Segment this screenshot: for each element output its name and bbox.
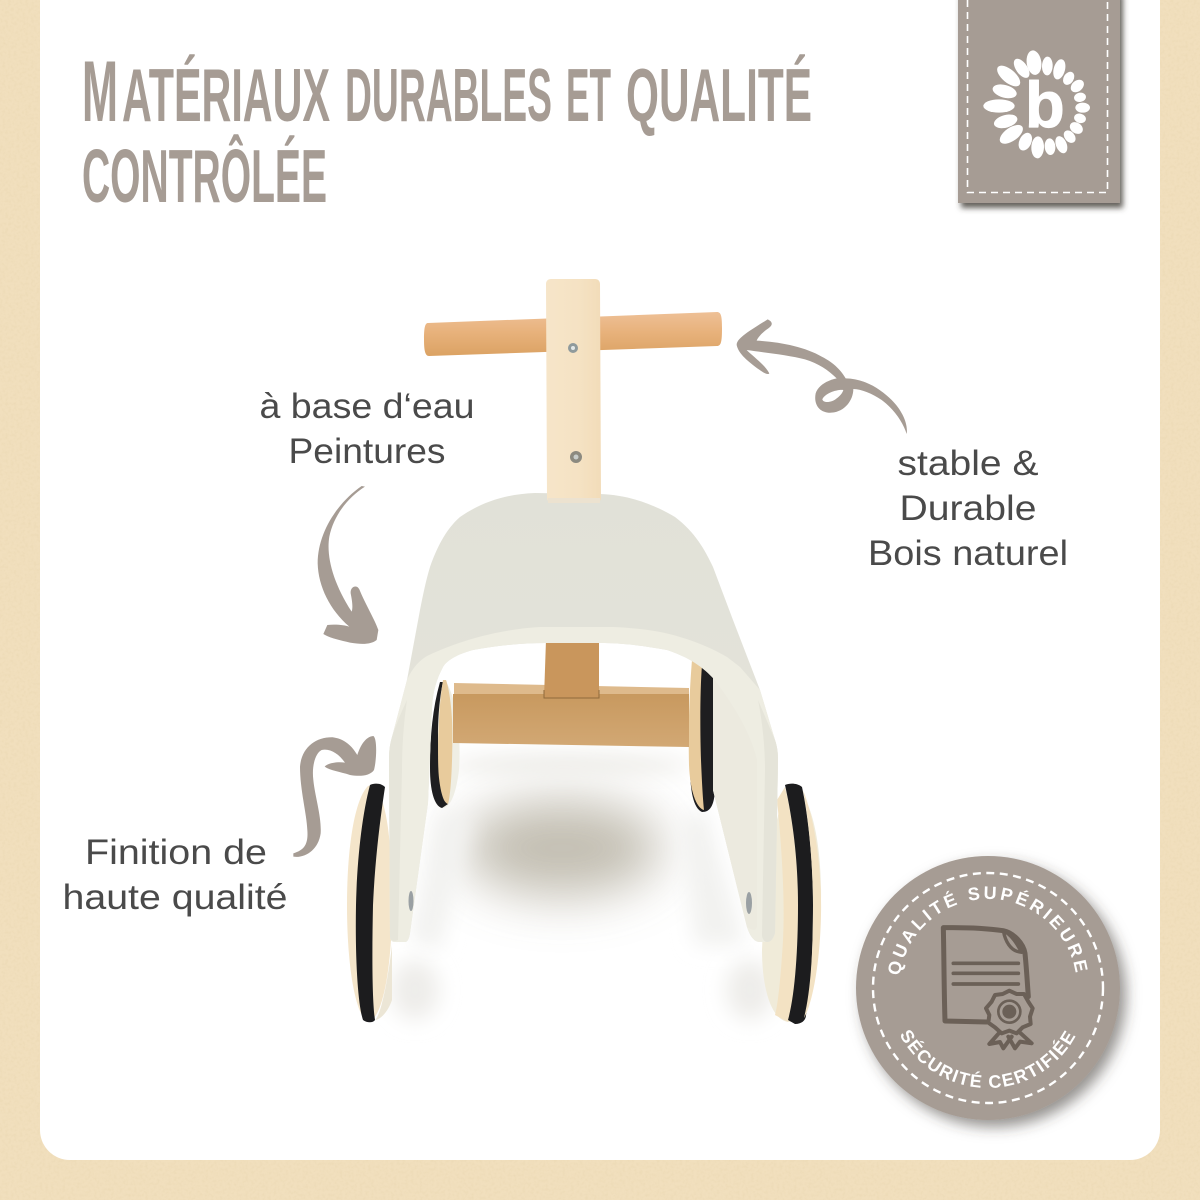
label: high quality finish: haute qualité bbox=[62, 878, 288, 917]
label: natural wood bbox=[868, 444, 1068, 573]
title bbox=[82, 44, 812, 218]
label: natural wood: Durable bbox=[900, 489, 1036, 528]
label: natural wood: Bois naturel bbox=[868, 534, 1068, 573]
title: DURABLES bbox=[345, 53, 552, 137]
floor shadow bbox=[391, 753, 774, 1020]
logo tag bbox=[958, 0, 1120, 203]
icon: flower logo bbox=[983, 49, 1090, 159]
lower stem bbox=[546, 640, 599, 698]
handlebar bbox=[424, 312, 722, 356]
badge: quality seal bbox=[852, 853, 1136, 1137]
icon: flower logo: b bbox=[1025, 68, 1065, 141]
arrow: to handlebar bbox=[737, 319, 907, 434]
bent plywood body bbox=[389, 493, 778, 942]
title: ATÉRIAUX bbox=[122, 53, 330, 137]
label: high quality finish: Finition de bbox=[85, 833, 267, 872]
arrow: to seat paint bbox=[318, 486, 378, 644]
steering post bbox=[546, 279, 601, 503]
rear left wheel bbox=[430, 680, 460, 808]
title: QUALITÉ bbox=[626, 53, 812, 137]
arrow: to finish bbox=[293, 736, 376, 857]
badge text bottom: SÉCURITÉ CERTIFIÉE bbox=[901, 1030, 1076, 1088]
label: high quality finish bbox=[62, 833, 288, 917]
icon: certificate bbox=[943, 928, 1033, 1048]
front right wheel bbox=[762, 784, 821, 1024]
badge text top: QUALITÉ SUPÉRIEURE bbox=[888, 886, 1088, 974]
front left bolt bbox=[408, 891, 414, 911]
label: natural wood: stable & bbox=[898, 444, 1038, 483]
title: M bbox=[82, 44, 118, 140]
front right bolt bbox=[746, 892, 752, 914]
rear right wheel bbox=[689, 660, 715, 812]
title: ET bbox=[566, 53, 611, 137]
label: water-based paints: Peintures bbox=[288, 432, 446, 471]
label: water-based paints bbox=[260, 387, 474, 471]
product: wooden balance bike bbox=[347, 279, 821, 1024]
title: CONTRÔLÉE bbox=[82, 134, 327, 218]
cross beam bbox=[453, 640, 689, 747]
front left wheel bbox=[347, 784, 392, 1022]
label: water-based paints: à base d‘eau bbox=[260, 387, 474, 426]
